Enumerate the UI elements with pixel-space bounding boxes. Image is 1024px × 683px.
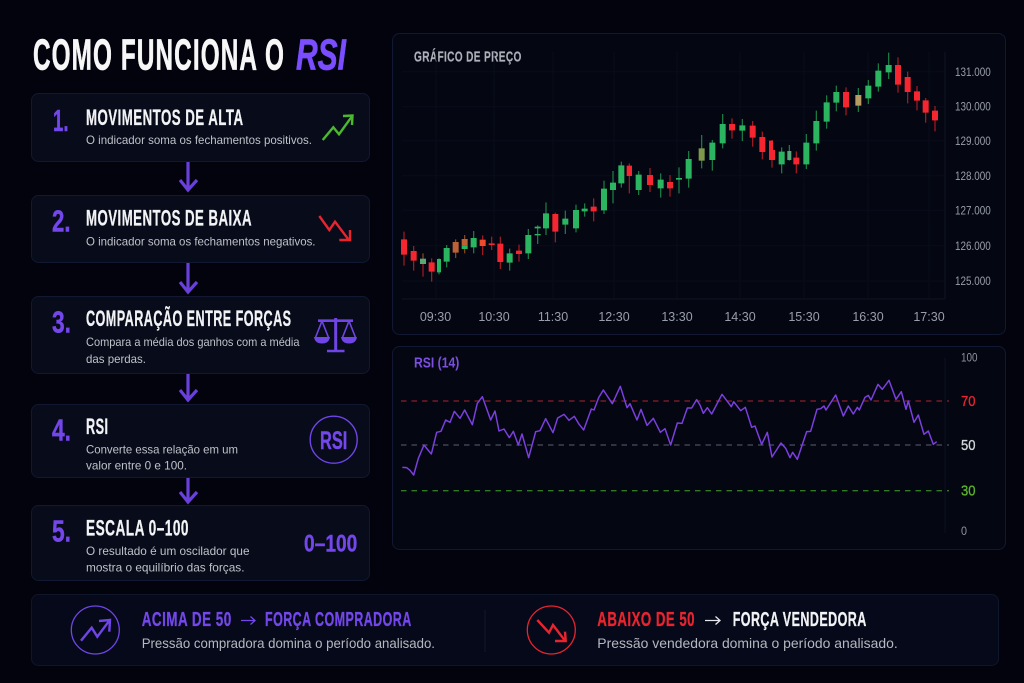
RSI axis labels: 50 <box>961 438 976 454</box>
panel: step 4: 4. <box>52 413 71 448</box>
panel: step 4: RSI <box>86 414 108 439</box>
panel: step 5 <box>32 506 370 580</box>
panel: step 1: MOVIMENTOS DE ALTA <box>86 105 244 130</box>
panel: step 5: ESCALA 0–100 <box>86 516 189 541</box>
arrow: step 2 to 3 <box>180 263 197 292</box>
selling force block: ABAIXO DE 50 <box>597 609 695 631</box>
time axis labels: 15:30 <box>788 310 820 324</box>
title <box>33 32 347 80</box>
panel: step 4: valor entre 0 e 100. <box>86 458 187 472</box>
icon: RSI badge <box>310 416 357 463</box>
time axis labels: 11:30 <box>538 310 568 324</box>
panel: step 5: 5. <box>52 514 71 549</box>
heading: RSI: RSI (14) <box>414 355 459 372</box>
panel: step 5: mostra o equilíbrio das forças. <box>86 561 244 575</box>
panel: step 2: 2. <box>52 204 70 239</box>
selling force block: FORÇA VENDEDORA <box>733 609 867 631</box>
panel: step 3: das perdas. <box>86 352 146 366</box>
panel: step 1 <box>32 94 370 162</box>
panel: step 2 <box>32 196 370 262</box>
buying force block: FORÇA COMPRADORA <box>265 609 412 631</box>
icon: green up arrow <box>323 116 352 140</box>
scale label 0-100: 0–100 <box>304 531 357 558</box>
arrow: step 3 to 4 <box>180 374 197 400</box>
buying force block: Pressão compradora domina o período analisado. <box>142 635 435 651</box>
time axis labels: 12:30 <box>598 310 630 324</box>
time axis labels: 16:30 <box>852 310 884 324</box>
RSI axis labels <box>961 351 978 538</box>
buying force block: ACIMA DE 50 <box>142 609 232 631</box>
time axis labels <box>420 310 945 324</box>
icon: selling circle <box>527 606 575 654</box>
RSI axis labels: 100 <box>961 351 978 365</box>
panel: step 5: O resultado é um oscilador que <box>86 544 250 558</box>
RSI axis labels: 30 <box>961 484 976 500</box>
price axis labels: 126.000 <box>955 239 991 253</box>
panel: price chart <box>392 34 1006 334</box>
panel: step 3: Compara a média dos ganhos com a média <box>86 335 300 349</box>
icon: RSI badge: RSI <box>320 427 347 455</box>
price axis labels: 127.000 <box>955 204 991 218</box>
level line 30 <box>401 490 949 492</box>
title: RSI <box>296 32 347 80</box>
price axis labels: 129.000 <box>955 134 991 148</box>
panel: step 1: O indicador soma os fechamentos positivos. <box>86 133 312 147</box>
panel: step 2: O indicador soma os fechamentos negativos. <box>86 234 316 248</box>
time axis labels: 14:30 <box>724 310 756 324</box>
arrow: step 1 to 2 <box>180 162 197 190</box>
panel: step 3: 3. <box>52 305 71 340</box>
RSI line <box>402 380 937 475</box>
panel: step 4 <box>32 404 370 478</box>
selling force block <box>527 606 898 654</box>
time axis labels: 17:30 <box>913 310 945 324</box>
panel: step 1: 1. <box>53 103 68 138</box>
buying force block <box>71 606 435 654</box>
price axis labels: 128.000 <box>955 169 991 183</box>
time axis labels: 09:30 <box>420 310 451 324</box>
RSI axis labels: 0 <box>961 524 967 538</box>
panel: step 4: Converte essa relação em um <box>86 442 238 456</box>
panel: step 3: COMPARAÇÃO ENTRE FORÇAS <box>86 306 292 331</box>
RSI axis labels: 70 <box>961 394 976 410</box>
time axis labels: 13:30 <box>661 310 693 324</box>
icon: buying circle <box>71 606 119 654</box>
level line 50 <box>401 444 949 446</box>
panel: step 3 <box>32 296 370 374</box>
panel: bottom summary <box>32 594 998 666</box>
price axis labels <box>955 65 991 288</box>
icon: balance scale <box>314 318 357 351</box>
title: COMO FUNCIONA O <box>33 32 285 80</box>
selling force block: Pressão vendedora domina o período analisado. <box>597 635 898 651</box>
heading: price chart: GRÁFICO DE PREÇO <box>414 49 522 66</box>
level line 70 <box>401 400 949 402</box>
candlestick chart <box>401 53 938 282</box>
panel: RSI chart <box>392 346 1006 550</box>
price axis labels: 131.000 <box>955 65 991 79</box>
price axis labels: 125.000 <box>955 274 991 288</box>
time axis labels: 10:30 <box>478 310 510 324</box>
arrow: step 4 to 5 <box>180 478 197 502</box>
panel: step 2: MOVIMENTOS DE BAIXA <box>86 206 252 230</box>
icon: red down arrow <box>319 216 350 240</box>
price axis labels: 130.000 <box>955 100 991 114</box>
